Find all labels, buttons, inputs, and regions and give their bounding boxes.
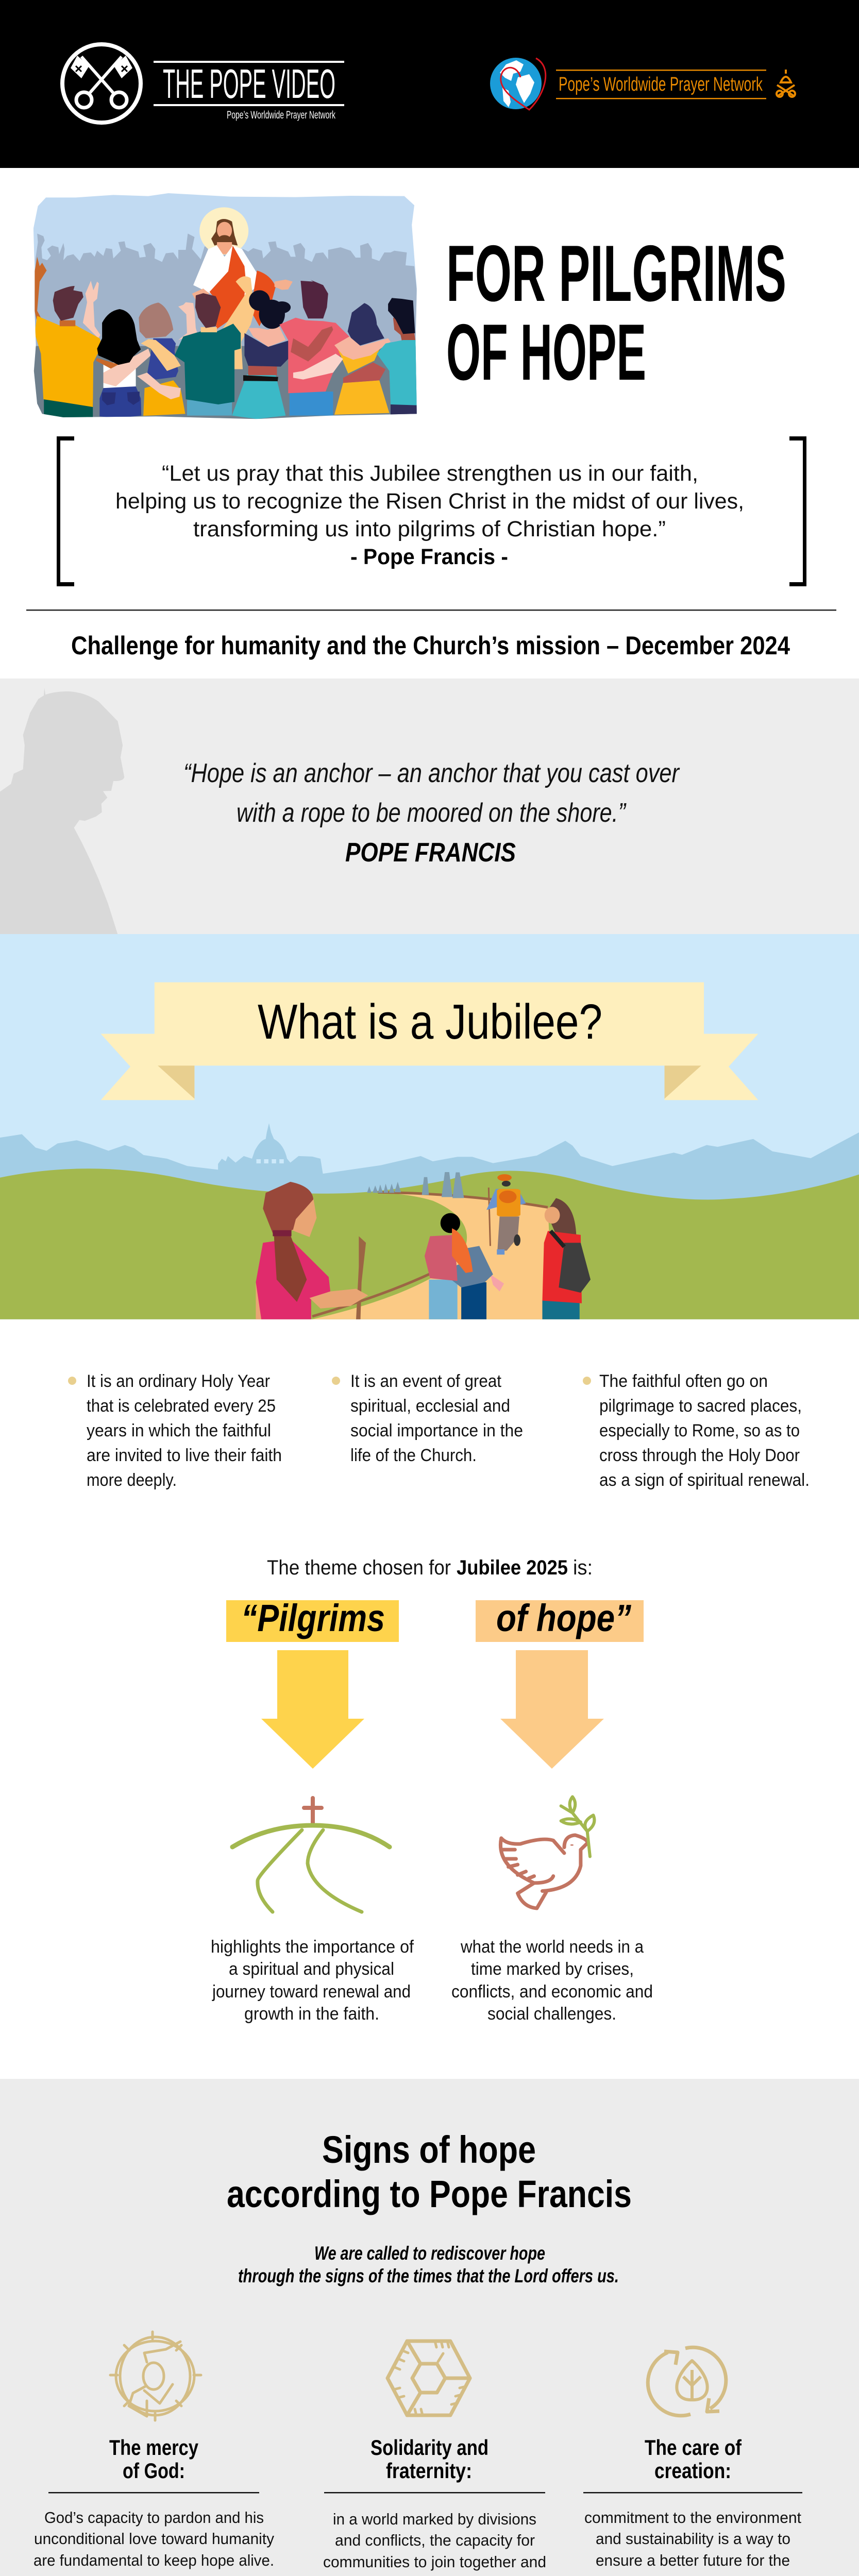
figure: girl with backpack — [542, 1198, 591, 1319]
bullet column 3: as a sign of spiritual renewal. — [599, 1470, 810, 1490]
text: pilgrims explanation — [211, 1937, 414, 2024]
papal quote in brackets: “Let us pray that this Jubilee strengthen us in our faith, — [162, 461, 698, 486]
logo: Jubilee 2025 — [0, 0, 606, 2576]
panel: hope quote: with a rope to be moored on the shore.” — [237, 798, 627, 828]
figure: yellow shirt — [35, 257, 102, 417]
green hills — [0, 1168, 859, 1319]
figure: yellow dress — [293, 303, 391, 415]
bullet column 3: especially to Rome, so as to — [599, 1421, 800, 1440]
figure: couple — [425, 1213, 504, 1319]
figure: girl with buns — [232, 290, 293, 419]
icon: small keys — [777, 70, 795, 97]
bullet column 1: years in which the faithful — [87, 1421, 271, 1440]
text: pilgrims explanation: a spiritual and physical — [229, 1959, 394, 1979]
icon: dove with olive branch — [500, 1797, 594, 1908]
figure: hiker — [486, 1174, 526, 1255]
sign text: mercy — [33, 2509, 274, 2569]
theme line — [267, 1556, 593, 1579]
logo: The Pope Video — [62, 44, 344, 123]
label: Pilgrims: “Pilgrims — [241, 1597, 385, 1639]
icon: crossed keys — [62, 44, 141, 123]
sign text: solidarity: in a world marked by divisions — [333, 2510, 536, 2528]
hero illustration: crowd around Jesus — [31, 191, 423, 422]
panel: hope quote: “Hope is an anchor – an anchor that you cast over — [183, 758, 680, 788]
text: pilgrims explanation: journey toward renewal and — [212, 1982, 411, 2002]
logo: The Pope Video: Pope’s Worldwide Prayer Network — [227, 109, 335, 121]
sign title: mercy: The mercy — [109, 2435, 199, 2460]
papal quote in brackets — [57, 436, 806, 586]
bracket: right — [789, 436, 806, 586]
bullet column 3: pilgrimage to sacred places, — [599, 1396, 802, 1416]
theme line: is: — [573, 1556, 593, 1579]
main title: OF HOPE — [446, 308, 646, 397]
panel: hope quote: POPE FRANCIS — [345, 838, 516, 868]
header band — [0, 0, 859, 168]
text: pilgrims explanation: highlights the importance of — [211, 1937, 414, 1957]
icon: leaf in cycle — [648, 2347, 726, 2416]
icon: joined hands — [388, 2341, 470, 2415]
sign title: solidarity: fraternity: — [386, 2459, 472, 2483]
text: hope explanation: time marked by crises, — [471, 1959, 634, 1979]
sign title: mercy — [109, 2435, 199, 2483]
figure: Jesus — [192, 207, 293, 369]
arrow: down yellow — [261, 1650, 364, 1769]
sign title: creation: creation: — [654, 2459, 731, 2483]
label: of hope: of hope” — [496, 1597, 631, 1639]
bullet column 2: spiritual, ecclesial and — [350, 1396, 510, 1416]
bullet column 2 — [332, 1371, 523, 1465]
bullet column 1: that is celebrated every 25 — [87, 1396, 276, 1416]
heading: Signs of hope — [322, 2128, 536, 2171]
intro: We are called to rediscover hope — [314, 2243, 545, 2264]
bullet column 1: It is an ordinary Holy Year — [87, 1371, 270, 1391]
text: hope explanation: what the world needs in a — [460, 1937, 644, 1957]
text: hope explanation: social challenges. — [487, 2004, 616, 2024]
bracket: left — [57, 436, 74, 586]
banner title: What is a Jubilee? — [258, 994, 602, 1049]
theme line: The theme chosen for — [267, 1556, 451, 1579]
papal quote in brackets: helping us to recognize the Risen Christ in the midst of our lives, — [115, 489, 744, 514]
sign text: mercy: are fundamental to keep hope alive. — [33, 2551, 274, 2569]
sign title: creation — [645, 2435, 742, 2483]
logo: Pope's Worldwide Prayer Network — [490, 58, 795, 110]
bullet column 2: social importance in the — [350, 1421, 523, 1440]
sign text: creation — [584, 2509, 801, 2576]
figure: pink shirt — [279, 280, 349, 416]
road — [312, 1192, 553, 1319]
sign text: creation: commitment to the environment — [584, 2509, 801, 2527]
sign title: mercy: of God: — [123, 2459, 185, 2483]
theme line: Jubilee 2025 — [457, 1556, 568, 1579]
icon: road and cross — [232, 1798, 390, 1912]
logo: The Pope Video: THE POPE VIDEO — [163, 61, 335, 107]
heading — [227, 2128, 632, 2215]
sign text: solidarity: and conflicts, the capacity for — [335, 2531, 535, 2549]
heading: according to Pope Francis — [227, 2173, 632, 2215]
sign text: solidarity — [323, 2510, 546, 2576]
arrow: down peach — [500, 1650, 604, 1769]
bullet column 3: The faithful often go on — [599, 1371, 768, 1391]
intro: through the signs of the times that the Lord offers us. — [238, 2265, 619, 2286]
banner ribbon — [101, 982, 758, 1100]
text: pilgrims explanation: growth in the faith. — [244, 2004, 379, 2024]
bullet column 2: It is an event of great — [350, 1371, 502, 1391]
figure: girl with black hair — [96, 309, 151, 418]
figure: teal shirt right — [377, 298, 417, 415]
bullet column 1: more deeply. — [87, 1470, 177, 1490]
papal quote in brackets: - Pope Francis - — [350, 545, 508, 569]
sign text: mercy: God’s capacity to pardon and his — [44, 2509, 264, 2527]
sign text: solidarity: communities to join together and — [323, 2553, 546, 2571]
sign text: creation: ensure a better future for the — [596, 2551, 790, 2569]
text: hope explanation: conflicts, and economic and — [451, 1982, 653, 2002]
figure: girl with pale hair — [137, 302, 186, 416]
mountains — [0, 1132, 859, 1216]
panel: signs of hope — [0, 2079, 859, 2576]
figure: girl with staff — [256, 1182, 368, 1319]
papal quote in brackets: transforming us into pilgrims of Christian hope.” — [193, 517, 666, 541]
sign title: solidarity: Solidarity and — [370, 2435, 489, 2460]
far pilgrims — [367, 1172, 464, 1198]
logo: Pope's Worldwide Prayer Network: Pope’s Worldwide Prayer Network — [559, 74, 763, 95]
sign text: creation: and sustainability is a way to — [596, 2530, 790, 2548]
sign title: creation: The care of — [645, 2435, 742, 2460]
St Peter's dome — [218, 1123, 323, 1176]
bullets: Jubilee facts — [68, 1371, 810, 1490]
sign text: mercy: unconditional love toward humanity — [34, 2530, 274, 2548]
sign title: solidarity — [370, 2435, 489, 2483]
crowd silhouette — [31, 233, 418, 349]
bullet column 2: life of the Church. — [350, 1446, 477, 1465]
bullet column 3 — [583, 1371, 810, 1490]
intro — [238, 2243, 619, 2286]
text: hope explanation — [451, 1937, 653, 2024]
silhouette: Pope Francis — [0, 688, 124, 935]
bullet column 1: are invited to live their faith — [87, 1446, 282, 1465]
panel: hope quote — [0, 679, 859, 935]
bullet column 3: cross through the Holy Door — [599, 1446, 800, 1465]
bullet column 1 — [68, 1371, 282, 1490]
figure: teal shirt — [141, 293, 241, 416]
main title — [446, 229, 786, 397]
panel: pilgrim landscape — [0, 934, 859, 1319]
icon: crown of thorns — [110, 2332, 201, 2420]
icon: globe with heart — [490, 58, 546, 110]
